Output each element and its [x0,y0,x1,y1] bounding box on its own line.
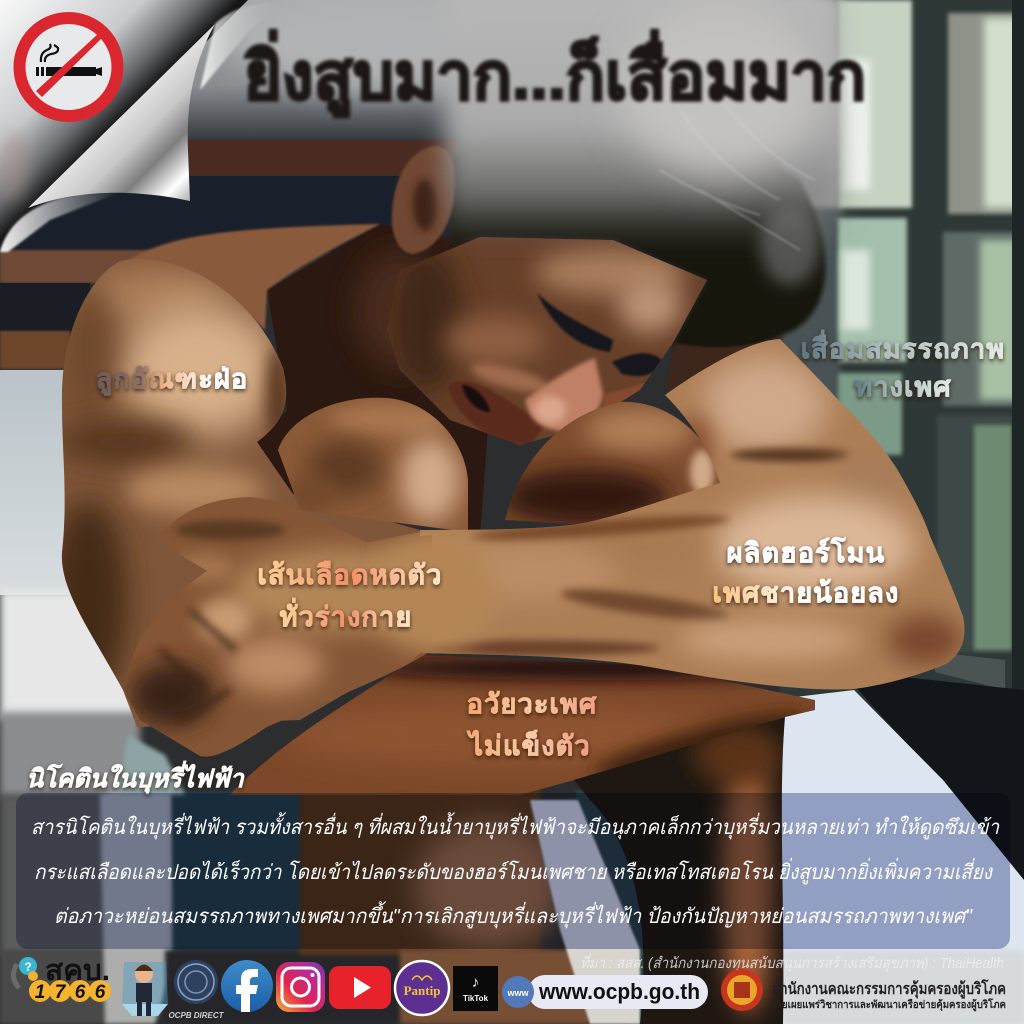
icon: tiktok: ♪ [472,974,479,991]
label: less male hormone: เพศชายน้อยลง [713,578,899,608]
label: no erection: ไม่แข็งตัว [466,728,591,761]
label: sexual performance decline: ทางเพศ [854,372,952,402]
agency name: ฝ่ายเผยแพร่วิชาการและพัฒนาเครือข่ายคุ้มครองผู้บริโภค [771,998,1006,1012]
title: ยิ่งสูบมาก...ก็เสื่อมมาก [244,29,866,118]
logo: pantip: Pantip [404,983,440,998]
icon: facebook [221,960,273,1012]
man: small towel by hand [118,735,185,795]
man: ear [392,146,455,254]
man: left knee [278,398,468,530]
logo: pantip [395,961,449,1015]
label: no erection [466,689,597,761]
label: testicular atrophy: ลูกอัณฑะฝ่อ [96,364,248,396]
lower dark backdrop behind legs [0,775,660,1024]
logo: hotline 1766: สคบ. [45,955,110,987]
website pill with globe: www [506,988,529,998]
window with green garden panes [780,0,1024,700]
logo: hotline 1766 [13,955,111,1003]
label: sexual performance decline: เสื่อมสมรรถภาพ [801,329,1005,364]
man: right shoulder and forearm [420,339,964,690]
logo: mascot character [122,962,168,1016]
icon: tiktok: TikTok [463,994,489,1003]
floor dark area [840,670,1024,885]
icon: youtube [329,966,391,1009]
section heading: นิโคตินในบุหรี่ไฟฟ้า [26,760,245,794]
body paragraph [31,812,1000,929]
logo: hotline 1766: 1 [35,982,45,1003]
man: right knee [505,402,720,524]
bed sheet right [770,690,1024,1024]
body paragraph: ต่อภาวะหย่อนสมรรถภาพทางเพศมากขึ้น"การเลิกสูบบุหรี่และบุหรี่ไฟฟ้า ป้องกันปัญหาหย่อนสมรรถภาพทางเพศ" [54,901,974,929]
agency name [771,978,1006,1012]
smoke cloud over the head [230,0,840,285]
label: blood vessels constrict: เส้นเลือดหดตัว [258,560,442,590]
label: less male hormone: ผลิตฮอร์โมน [727,536,885,568]
man: shin leg [570,710,790,1024]
logo: agency seal [721,969,763,1011]
logo: OCPB direct [168,960,225,1020]
website pill with globe: www.ocpb.go.th [538,979,700,1004]
page curl: corner and flap [0,0,285,252]
label: less male hormone [713,536,899,608]
label: sexual performance decline [801,329,1005,402]
label: blood vessels constrict: ทั่วร่างกาย [280,597,412,632]
icon: no vaping sign [20,18,118,116]
man: lower arm below elbow [230,655,815,795]
logo: hotline 1766: ? [24,960,32,974]
man: clenched hand [123,497,432,757]
man: wrist blending hand into forearm [367,530,497,654]
logo: hotline 1766: 6 [75,982,86,1003]
man: back and chest in shadow [125,224,490,535]
man: upper left arm [62,259,420,727]
logo: OCPB direct: OCPB DIRECT [168,1011,225,1020]
label: no erection: อวัยวะเพศ [467,689,597,719]
icon: instagram [276,962,325,1012]
icon: tiktok [453,966,498,1011]
panel: text explanation [16,793,1010,949]
man: crying face [387,237,707,445]
man: hair [440,122,825,388]
label: blood vessels constrict [258,560,442,632]
logo: hotline 1766: 7 [55,982,67,1003]
website pill with globe [502,975,708,1009]
footer logo row [13,955,1006,1020]
logo: hotline 1766: 6 [95,982,106,1003]
